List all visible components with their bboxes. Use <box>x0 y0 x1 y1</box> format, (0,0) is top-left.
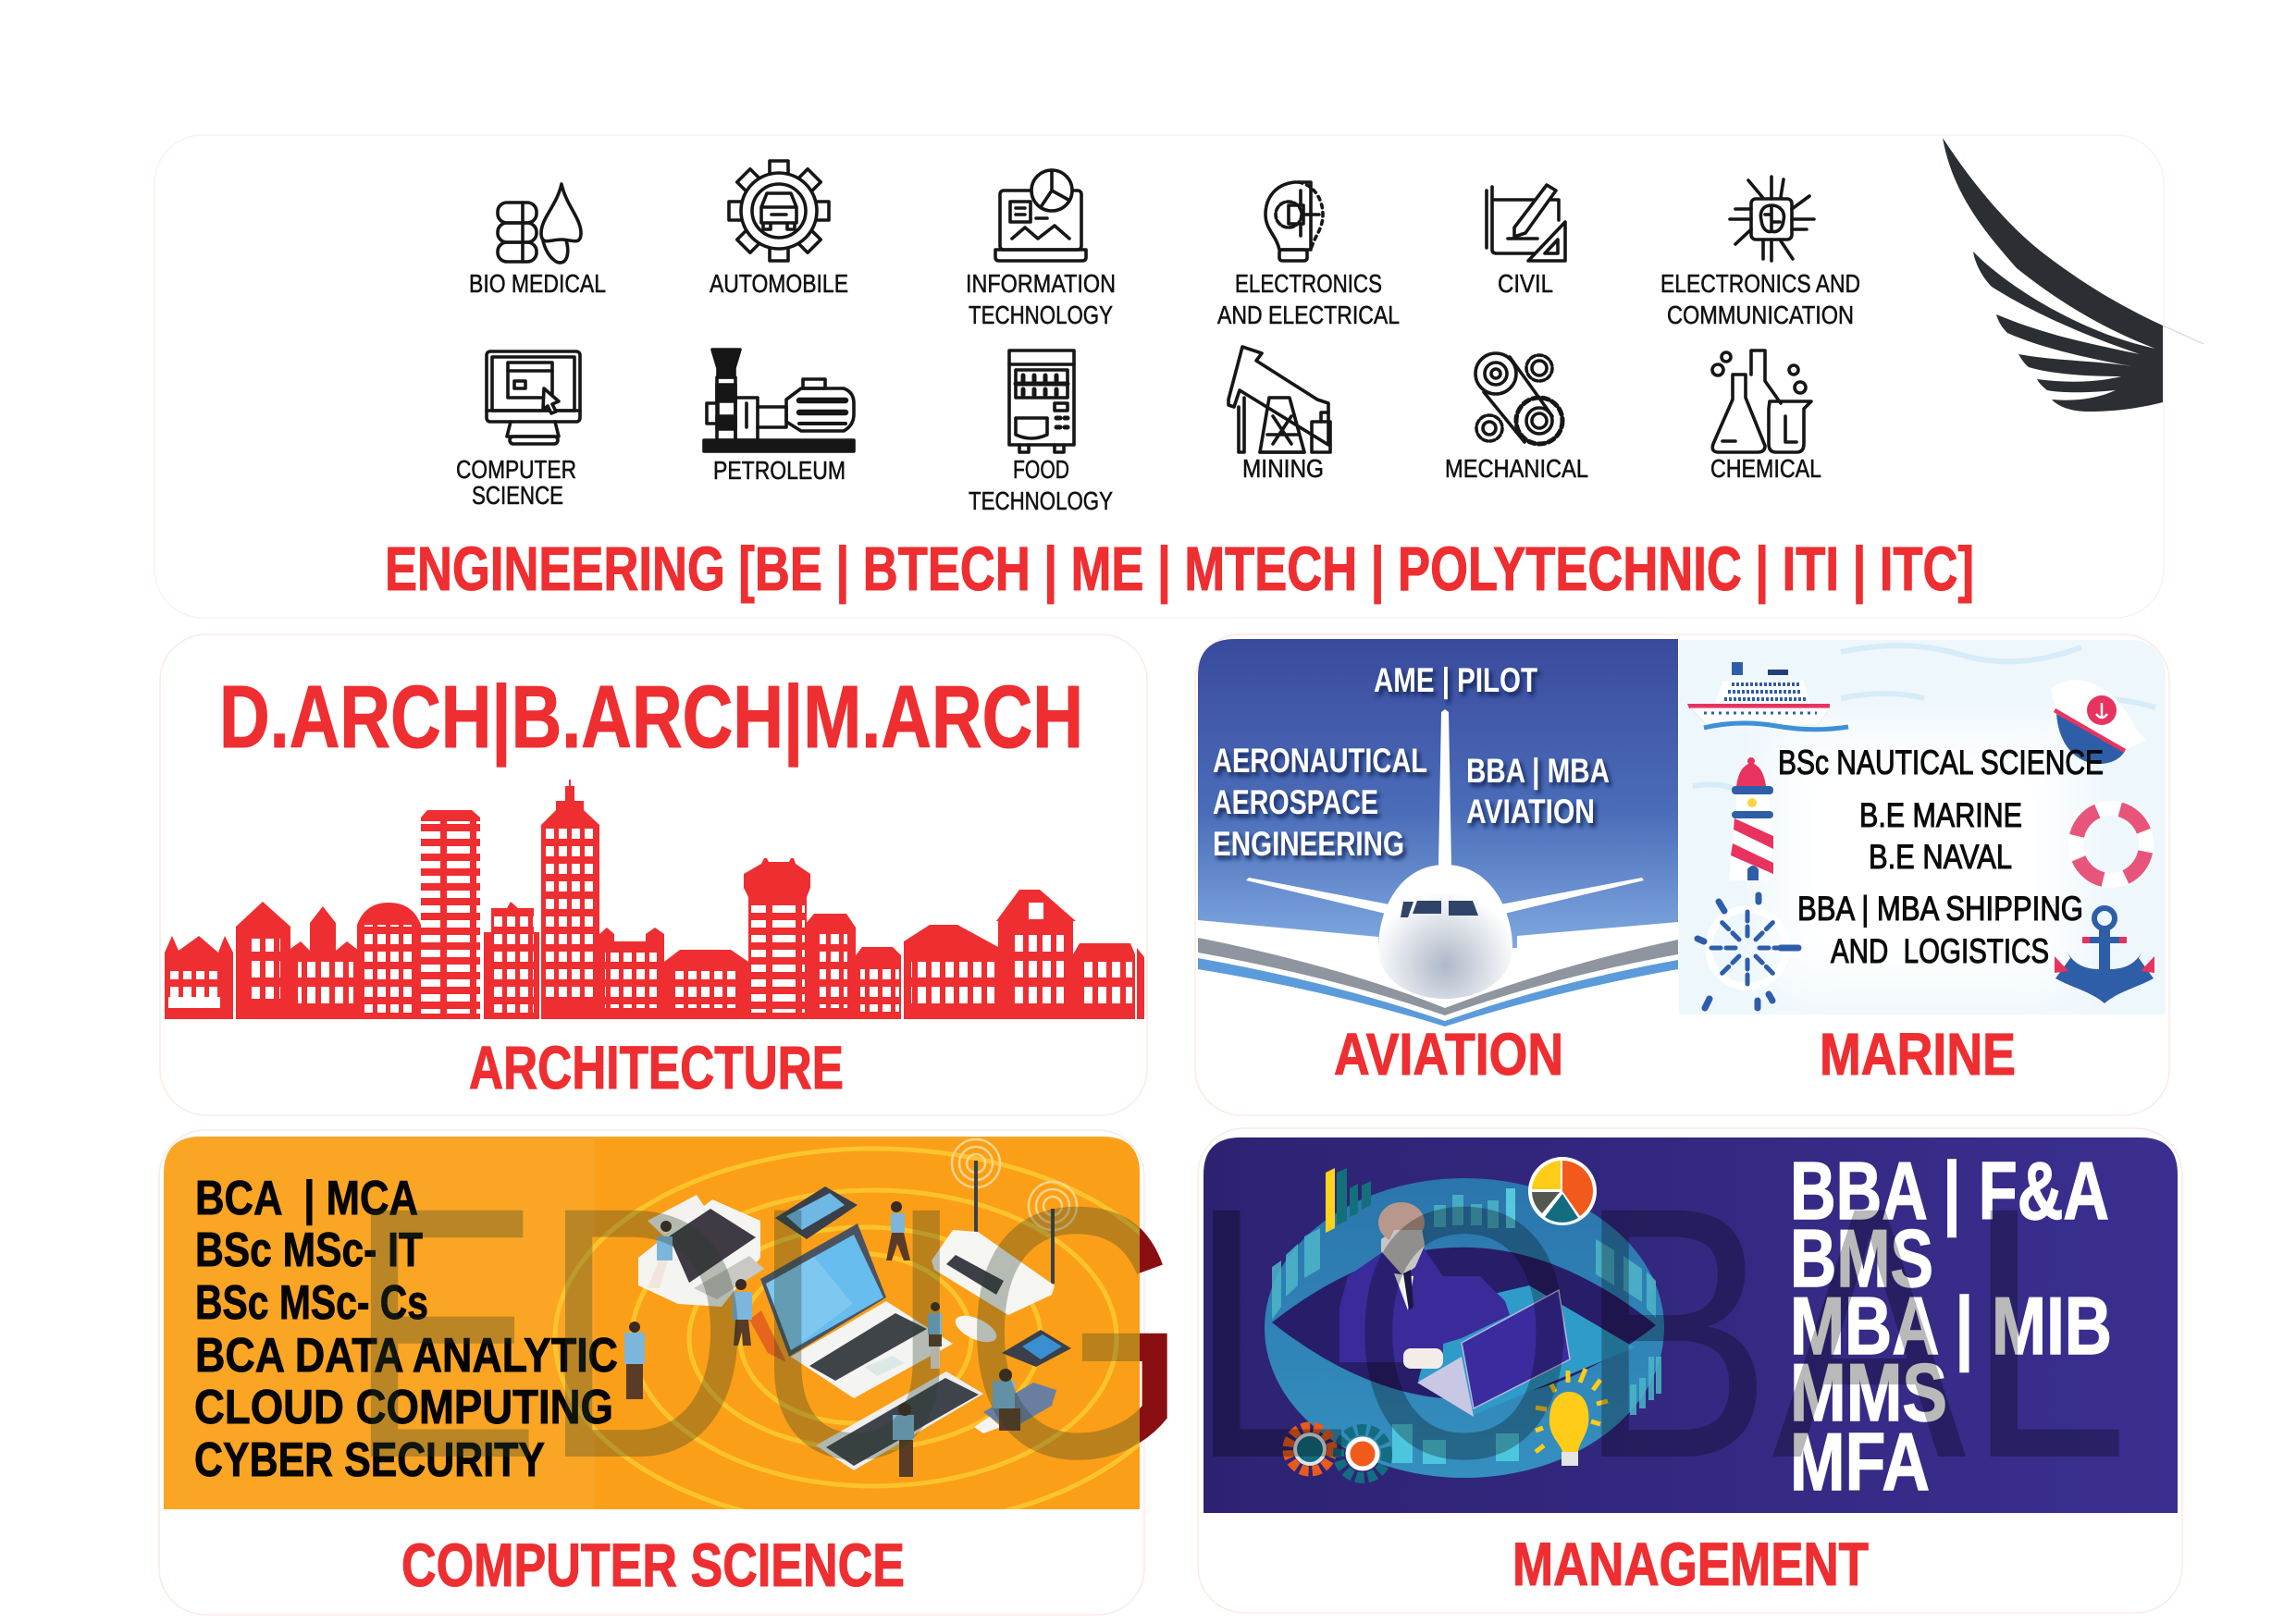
panel: engineering <box>154 135 2164 618</box>
text: aviation courses: AEROSPACE <box>1213 783 1378 821</box>
text: marine courses <box>1778 744 2104 970</box>
heading: marine: MARINE <box>1820 1021 2016 1088</box>
icon: petroleum pump <box>704 350 854 451</box>
heading: management: MANAGEMENT <box>1512 1530 1869 1598</box>
icon: captain hat <box>2051 680 2146 764</box>
watermark: EDUGLOBAL <box>370 1206 2118 1460</box>
icon: mouse <box>955 1315 997 1343</box>
label: COMMUNICATION <box>1667 301 1854 329</box>
label: MECHANICAL <box>1445 454 1588 483</box>
icon: electronics bulb <box>1265 182 1323 261</box>
panel: computer science <box>159 1130 1193 1615</box>
icon: laptop <box>760 1223 953 1398</box>
icon: airplane <box>1246 709 1644 999</box>
icon: light bulb <box>1536 1369 1608 1466</box>
illustration: marine background <box>1679 640 2166 1014</box>
illustration: aviation background <box>1198 639 1678 1027</box>
icon: router <box>932 1161 1055 1315</box>
label: SCIENCE <box>472 481 563 510</box>
label: FOOD <box>1013 455 1069 484</box>
text: computer courses: BSc MSc- Cs <box>195 1276 428 1330</box>
icon: gears <box>1288 1427 1387 1478</box>
text: management courses: BMS <box>1790 1212 1933 1304</box>
text: marine courses: B.E MARINE <box>1859 796 2022 834</box>
label: BIO MEDICAL <box>469 269 606 298</box>
chart: bars <box>1326 1168 1371 1233</box>
chart: red city skyline <box>165 780 1144 1019</box>
panel: aviation and marine <box>1195 634 2169 1115</box>
icon: usb stick <box>974 1383 1056 1433</box>
chart: pie <box>1528 1157 1597 1225</box>
label: ELECTRONICS <box>1235 269 1382 298</box>
heading: architecture: ARCHITECTURE <box>469 1033 844 1101</box>
label: CHEMICAL <box>1710 454 1821 483</box>
icon: chip brain <box>1730 177 1814 261</box>
text: computer courses: BCA DATA ANALYTIC <box>195 1329 618 1383</box>
icon: keyboard <box>816 1371 983 1470</box>
label: TECHNOLOGY <box>969 486 1113 515</box>
text: aviation courses: AVIATION <box>1466 793 1595 830</box>
label: PETROLEUM <box>713 456 846 485</box>
icon: mechanical gears <box>1475 353 1562 444</box>
label: TECHNOLOGY <box>969 301 1113 329</box>
icon: chemical flasks <box>1712 350 1811 452</box>
panel: management <box>1198 1128 2182 1613</box>
icon: sd card <box>1002 1330 1071 1367</box>
icon: computer monitor <box>487 351 580 444</box>
illustration: manager with data ring <box>1265 1157 1664 1478</box>
illustration: network devices <box>553 1137 1140 1509</box>
label: ELECTRONICS AND <box>1660 269 1860 298</box>
label: COMPUTER <box>456 455 576 484</box>
icon: ship wheel <box>1697 895 1798 1008</box>
icon: automobile gear <box>729 161 829 261</box>
icon: tablet <box>775 1187 858 1239</box>
icon: wing logo <box>1943 138 2203 412</box>
text: marine courses: BBA | MBA SHIPPING <box>1797 890 2083 928</box>
text: aviation courses: ENGINEERING <box>1213 825 1404 863</box>
text: management courses: MFA <box>1790 1416 1930 1507</box>
text: computer courses: BSc MSc- IT <box>195 1223 423 1277</box>
icon: information technology <box>995 170 1086 261</box>
text: marine courses: AND LOGISTICS <box>1831 932 2049 970</box>
text: management courses: MBA | MIB <box>1790 1280 2112 1372</box>
icon: printer <box>638 1195 764 1307</box>
icon: civil <box>1487 185 1565 261</box>
text: computer courses <box>194 1172 618 1487</box>
icon: life ring <box>2076 808 2146 880</box>
label: INFORMATION <box>966 269 1116 298</box>
label: AND ELECTRICAL <box>1217 301 1400 329</box>
label: MINING <box>1242 454 1324 483</box>
person <box>1339 1202 1510 1369</box>
text: management courses <box>1790 1145 2112 1507</box>
text: computer courses: CYBER SECURITY <box>194 1433 545 1487</box>
text: aviation courses: AERONAUTICAL <box>1213 742 1427 780</box>
text: marine courses: B.E NAVAL <box>1869 838 2012 876</box>
icon: mining pump jack <box>1228 347 1330 452</box>
icon: lighthouse <box>1729 757 1773 880</box>
text: aviation courses: AME | PILOT <box>1374 661 1537 700</box>
people <box>624 1201 1020 1477</box>
text: computer courses: CLOUD COMPUTING <box>194 1381 613 1434</box>
heading: arch degrees: D.ARCH|B.ARCH|M.ARCH <box>219 668 1083 768</box>
icon: food technology machine <box>1009 350 1074 452</box>
text: aviation courses <box>1213 661 1610 863</box>
icon: bio medical <box>498 184 581 266</box>
text: marine courses: BSc NAUTICAL SCIENCE <box>1778 744 2104 781</box>
heading: aviation: AVIATION <box>1334 1021 1563 1088</box>
text: aviation courses: BBA | MBA <box>1466 752 1610 791</box>
icon: anchor <box>2055 908 2154 1003</box>
text: management courses: MMS <box>1790 1346 1947 1438</box>
laptop shadow <box>749 1310 786 1362</box>
panel: architecture <box>160 634 1147 1115</box>
laptop <box>1417 1290 1570 1417</box>
text: computer courses: BCA | MCA <box>195 1172 418 1225</box>
label: AUTOMOBILE <box>710 269 848 298</box>
text: management courses: BBA | F&A <box>1790 1145 2109 1237</box>
icon: cruise ship <box>1687 662 1848 730</box>
label: CIVIL <box>1498 269 1553 298</box>
heading: computer science: COMPUTER SCIENCE <box>401 1531 905 1599</box>
